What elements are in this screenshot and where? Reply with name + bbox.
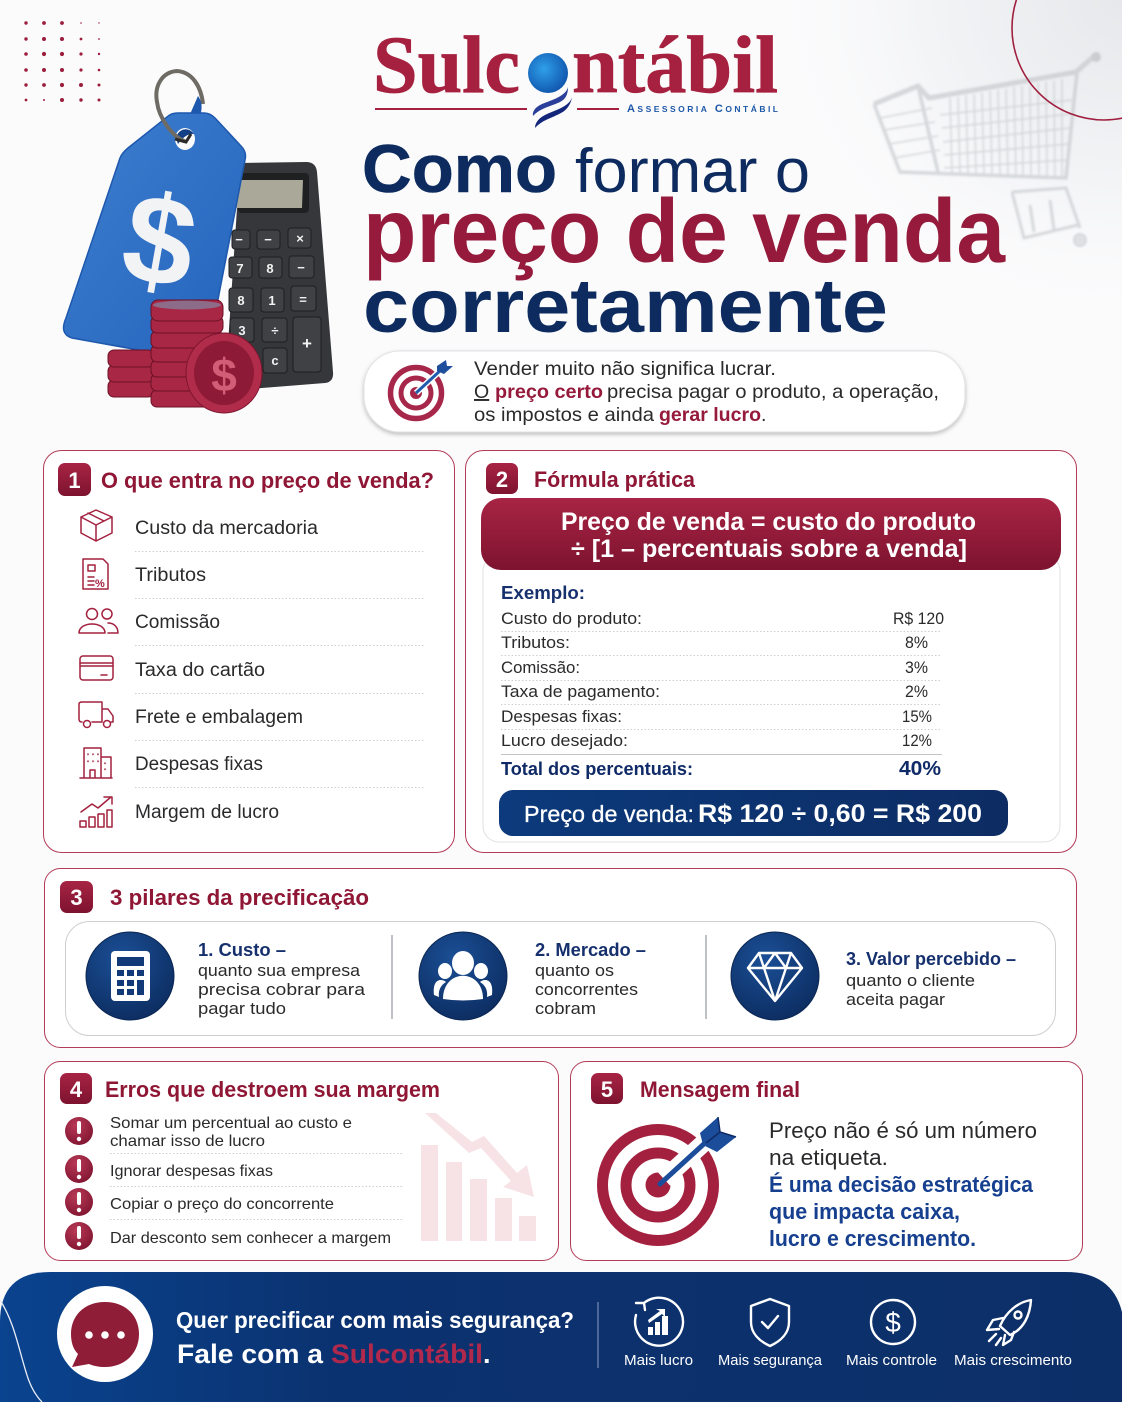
calculator: − xyxy=(297,260,305,275)
intro text: precisa pagar o produto, a operação, xyxy=(607,381,939,403)
formula banner xyxy=(481,498,1061,570)
item: tributos: Tributos xyxy=(135,565,206,586)
error 1 xyxy=(65,1115,352,1150)
heading 4: Erros que destroem sua margem xyxy=(105,1077,440,1102)
pillar 2: mercado: quanto os xyxy=(535,961,614,980)
badge 2: 2 xyxy=(496,467,508,492)
example table: Custo do produto: xyxy=(501,609,642,628)
panel 4: erros xyxy=(44,1062,558,1260)
coin stacks xyxy=(108,300,262,413)
badge 5 xyxy=(591,1073,623,1104)
panel 1: o que entra no preço xyxy=(44,450,454,852)
pillar 1: custo: quanto sua empresa xyxy=(198,961,361,980)
calculator: 7 xyxy=(236,261,244,276)
closing message: lucro e crescimento. xyxy=(769,1226,976,1251)
title: corretamente xyxy=(363,264,888,349)
pillar 1: custo: precisa cobrar para xyxy=(198,980,366,999)
logo: Sulcontábil: Sulc xyxy=(373,19,520,110)
badge 3 xyxy=(60,881,93,913)
benefit: mais segurança xyxy=(718,1299,823,1369)
error 3: Copiar o preço do concorrente xyxy=(110,1196,334,1213)
coin stacks: $ xyxy=(211,349,237,401)
item: custo da mercadoria xyxy=(81,510,318,541)
item: frete e embalagem: Frete e embalagem xyxy=(135,707,303,728)
calculator: + xyxy=(302,334,312,353)
item: custo da mercadoria: Custo da mercadoria xyxy=(135,518,318,539)
closing message: É uma decisão estratégica xyxy=(769,1172,1033,1197)
pillar 2: mercado xyxy=(419,932,646,1020)
heading 2: Fórmula prática xyxy=(534,467,696,492)
result pill: Preço de venda: xyxy=(524,801,694,827)
formula banner: ÷ [1 – percentuais sobre a venda] xyxy=(571,535,967,563)
item: taxa do cartão: Taxa do cartão xyxy=(135,660,265,681)
price tag with ring: $ xyxy=(113,165,206,316)
pillars container xyxy=(66,922,1056,1036)
logo: Sulcontábil: ntábil xyxy=(572,19,778,110)
intro callout xyxy=(364,351,965,432)
calculator: c xyxy=(271,353,279,368)
example table: 8% xyxy=(905,633,928,652)
intro text: preço certo xyxy=(495,381,603,403)
calculator xyxy=(225,162,333,390)
icon: target large xyxy=(602,1117,736,1240)
pillar 3: valor percebido: aceita pagar xyxy=(846,990,945,1009)
pillar 3: valor percebido xyxy=(731,932,1016,1020)
item: margem de lucro: Margem de lucro xyxy=(135,802,279,823)
panel 3: pilares xyxy=(44,868,1076,1048)
item: comissão xyxy=(79,608,220,633)
calculator: = xyxy=(299,292,307,307)
call to action xyxy=(176,1307,574,1369)
closing message xyxy=(769,1118,1037,1251)
logo: Sulcontábil xyxy=(373,19,778,128)
closing message: que impacta caixa, xyxy=(769,1199,960,1224)
badge 1: 1 xyxy=(68,468,81,493)
calculator: 8 xyxy=(266,261,274,276)
benefit: mais lucro xyxy=(624,1298,693,1369)
error 1: chamar isso de lucro xyxy=(110,1133,265,1150)
calculator: 1 xyxy=(268,293,276,308)
benefit: mais crescimento xyxy=(954,1300,1072,1369)
example table: Exemplo: xyxy=(501,583,585,603)
shopping cart watermark xyxy=(874,52,1101,246)
item: comissão: Comissão xyxy=(135,612,220,633)
example table: 12% xyxy=(902,731,932,750)
error 1: Somar um percentual ao custo e xyxy=(110,1115,352,1132)
price tag with ring xyxy=(64,71,245,352)
example table: 15% xyxy=(902,707,932,726)
calculator: − xyxy=(264,232,272,247)
title: formar o xyxy=(575,137,810,206)
result pill xyxy=(499,790,1008,836)
item: tributos xyxy=(83,559,206,590)
call to action: . xyxy=(483,1339,491,1369)
error 3 xyxy=(65,1188,334,1216)
heading 1: O que entra no preço de venda? xyxy=(101,468,434,493)
title: preço de venda xyxy=(363,182,1006,282)
intro text: os impostos e ainda xyxy=(474,404,654,426)
example table xyxy=(483,555,1060,842)
badge 4: 4 xyxy=(70,1077,83,1102)
benefit: mais controle: Mais controle xyxy=(846,1352,937,1369)
example table: Despesas fixas: xyxy=(501,707,622,726)
badge 5: 5 xyxy=(601,1077,613,1102)
item: margem de lucro xyxy=(80,797,279,827)
calculator: ÷ xyxy=(271,323,279,338)
pillar 1: custo: 1. Custo – xyxy=(198,940,286,960)
pillar 2: mercado: cobram xyxy=(535,999,596,1018)
icon: target small xyxy=(390,360,453,418)
example table: R$ 120 xyxy=(893,609,944,628)
intro text: O xyxy=(474,381,489,403)
pillar 2: mercado: concorrentes xyxy=(535,980,638,999)
example table: 40% xyxy=(899,758,941,780)
calculator: 3 xyxy=(238,323,246,338)
calculator: 8 xyxy=(237,293,245,308)
example table: 2% xyxy=(905,682,928,701)
example table: 3% xyxy=(905,658,928,677)
logo: Sulcontábil: A SSESSORIA C ONTÁBIL xyxy=(627,103,778,115)
error 2 xyxy=(65,1155,273,1183)
intro text: gerar lucro xyxy=(659,404,761,426)
closing message: na etiqueta. xyxy=(769,1145,888,1170)
pillar 1: custo: pagar tudo xyxy=(198,999,286,1018)
benefit: mais controle xyxy=(846,1300,937,1369)
corner circle outline xyxy=(1012,0,1122,120)
call to action: Fale com a xyxy=(177,1339,324,1369)
item: frete e embalagem xyxy=(79,702,303,728)
benefit: mais segurança: Mais segurança xyxy=(718,1352,823,1369)
item: taxa do cartão xyxy=(80,656,265,681)
formula banner: Preço de venda = custo do produto xyxy=(561,508,976,536)
intro text: Vender muito não significa lucrar. xyxy=(474,358,776,380)
error 2: Ignorar despesas fixas xyxy=(110,1163,273,1180)
pillar 2: mercado: 2. Mercado – xyxy=(535,940,646,960)
icon: falling chart watermark xyxy=(421,1113,536,1241)
title xyxy=(362,131,1006,349)
intro text xyxy=(474,358,939,426)
icon: chat bubble xyxy=(57,1286,153,1382)
benefit: mais lucro: Mais lucro xyxy=(624,1352,693,1369)
intro text: . xyxy=(761,404,766,426)
panel 2: fórmula prática xyxy=(466,450,1076,852)
badge 4 xyxy=(60,1073,92,1104)
benefit: mais controle: $ xyxy=(885,1307,901,1338)
example table: Comissão: xyxy=(501,658,580,677)
badge 1 xyxy=(58,463,91,496)
item: despesas fixas: Despesas fixas xyxy=(135,754,263,775)
pillar 3: valor percebido: quanto o cliente xyxy=(846,971,975,990)
calculator: × xyxy=(296,231,304,246)
error 4 xyxy=(65,1222,391,1250)
badge 2 xyxy=(486,463,518,494)
error 4: Dar desconto sem conhecer a margem xyxy=(110,1230,391,1247)
example table: Lucro desejado: xyxy=(501,731,628,750)
item: tributos: % xyxy=(95,578,105,590)
heading 3: 3 pilares da precificação xyxy=(110,885,369,910)
call to action: Quer precificar com mais segurança? xyxy=(176,1307,574,1333)
title: Como xyxy=(362,131,557,207)
panel 5: mensagem final xyxy=(570,1062,1082,1260)
pillar 1: custo xyxy=(86,932,366,1020)
example table: Tributos: xyxy=(501,633,570,652)
badge 3: 3 xyxy=(70,885,83,910)
decorative dot grid xyxy=(24,21,101,102)
pillar 3: valor percebido: 3. Valor percebido – xyxy=(846,949,1016,969)
footer banner xyxy=(0,1272,1122,1402)
call to action: Sulcontábil xyxy=(331,1339,483,1369)
benefit: mais crescimento: Mais crescimento xyxy=(954,1352,1072,1369)
example table: Taxa de pagamento: xyxy=(501,682,660,701)
closing message: Preço não é só um número xyxy=(769,1118,1037,1143)
result pill: R$ 120 ÷ 0,60 = R$ 200 xyxy=(698,800,982,828)
calculator: − xyxy=(235,232,243,247)
example table: Total dos percentuais: xyxy=(501,759,693,779)
item: despesas fixas xyxy=(80,748,263,778)
heading 5: Mensagem final xyxy=(640,1077,800,1102)
